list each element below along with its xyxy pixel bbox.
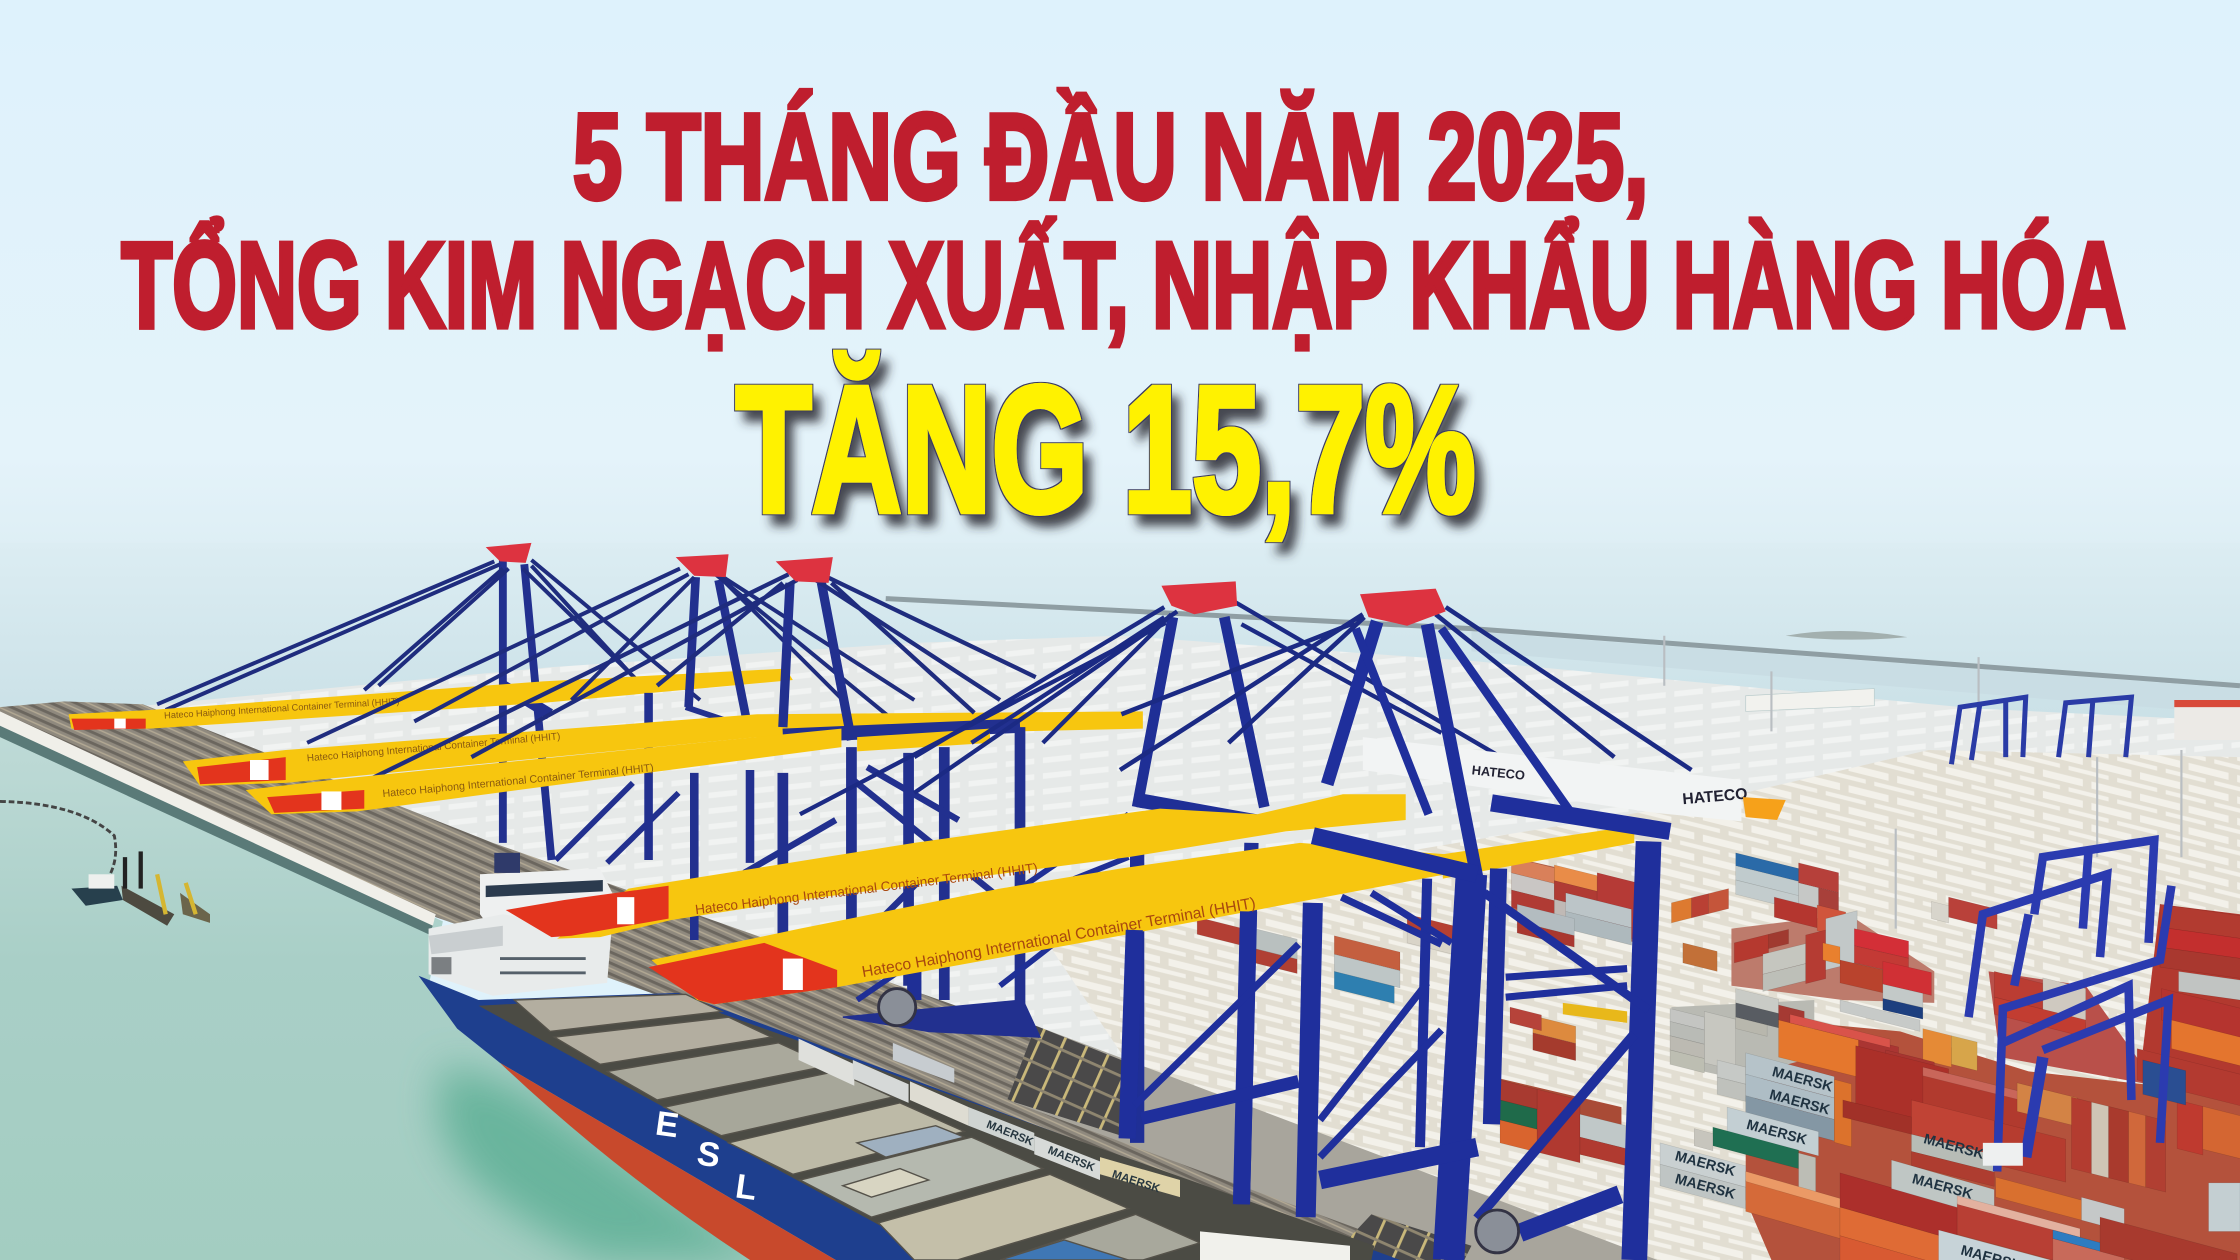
crane 3 (246, 557, 1040, 1037)
ship hatch covers (514, 994, 1200, 1260)
crane 5 front boom (649, 843, 1446, 1004)
crane 2 top (676, 554, 729, 577)
container labels: MAERSK (1745, 1117, 1809, 1149)
ship name: S (695, 1135, 723, 1175)
gantry crane cabin (1983, 1143, 2023, 1166)
crane 1 (69, 543, 793, 860)
deck containers (799, 1039, 1350, 1260)
deck containers: MAERSK (1046, 1145, 1097, 1174)
ship name: L (733, 1167, 759, 1208)
ship bridge superstructure (429, 853, 614, 996)
crane 3 top (776, 557, 833, 583)
crane 2 boom: Hateco Haiphong International Container Terminal (HHIT) (306, 731, 561, 764)
container yard block backing (1500, 857, 2240, 1260)
crane 5 front boom: Hateco Haiphong International Container Terminal (HHIT) (861, 895, 1257, 981)
container labels: MAERSK (1922, 1131, 1986, 1163)
crane 4 top (1161, 581, 1237, 614)
container stacks in the yard (1197, 847, 2240, 1260)
ship hull (419, 976, 1400, 1260)
deck containers: MAERSK (985, 1119, 1036, 1149)
lamp posts (1664, 636, 2181, 929)
container labels: MAERSK (1673, 1171, 1738, 1203)
ship name (653, 1105, 759, 1208)
crane 3 structure (371, 574, 1040, 1037)
crane 3 boom (246, 729, 990, 814)
deck containers: MAERSK (1111, 1169, 1162, 1196)
crane 5 top (1360, 589, 1446, 626)
crane 1 top (486, 543, 531, 563)
water foreground (0, 714, 943, 1260)
title line 1: 5 THÁNG ĐẦU NĂM 2025, (573, 89, 1649, 225)
crane 2 structure (307, 569, 914, 940)
ship (419, 853, 1400, 1260)
crane 1 boom (69, 669, 793, 730)
crane 2 boom (183, 711, 1143, 786)
crane 5 cable reel (1476, 1210, 1519, 1253)
crane 4 boom: Hateco Haiphong International Container Terminal (HHIT) (694, 860, 1039, 917)
crane 1 structure (157, 560, 700, 860)
crane 4 structure (800, 600, 1499, 1204)
crane spreader (1563, 1003, 1627, 1023)
crane 5 structure (1120, 607, 1691, 1260)
quay with crane rails (0, 701, 1657, 1260)
crane 4 cable reel (879, 989, 916, 1026)
crane 5 rear boom (1443, 826, 1634, 879)
container labels: MAERSK (1768, 1087, 1832, 1119)
breakwater on the horizon (886, 599, 2240, 714)
crane 5 white machinery house: HATECO (1682, 786, 1748, 808)
container labels (1673, 1064, 2023, 1260)
container labels: MAERSK (1673, 1148, 1738, 1180)
rubber-tyred gantry cranes, background (1951, 697, 2131, 764)
background: sky and sea (0, 0, 2240, 743)
container labels: MAERSK (1770, 1064, 1835, 1096)
container labels: MAERSK (1910, 1171, 1975, 1203)
crane 1 boom: Hateco Haiphong International Container Terminal (HHIT) (164, 696, 400, 721)
crane 4 boom (506, 794, 1406, 939)
ship name: E (653, 1105, 681, 1145)
dredger and tug boats (0, 801, 210, 926)
crane 4 (506, 581, 1499, 1204)
container yard ground (129, 636, 2240, 1260)
crane 5 white machinery house: HATECO (1471, 762, 1526, 783)
crane 2 (183, 554, 1143, 940)
headline figure: TĂNG 15,7% (736, 349, 1476, 550)
crane 5 (649, 589, 1786, 1260)
far shore buildings (1746, 689, 2240, 740)
crane 3 boom: Hateco Haiphong International Container Terminal (HHIT) (382, 762, 654, 800)
crane 5 white machinery house (1363, 737, 1786, 821)
title heading (121, 89, 2126, 353)
rubber-tyred gantry cranes, foreground (1969, 840, 2171, 1171)
